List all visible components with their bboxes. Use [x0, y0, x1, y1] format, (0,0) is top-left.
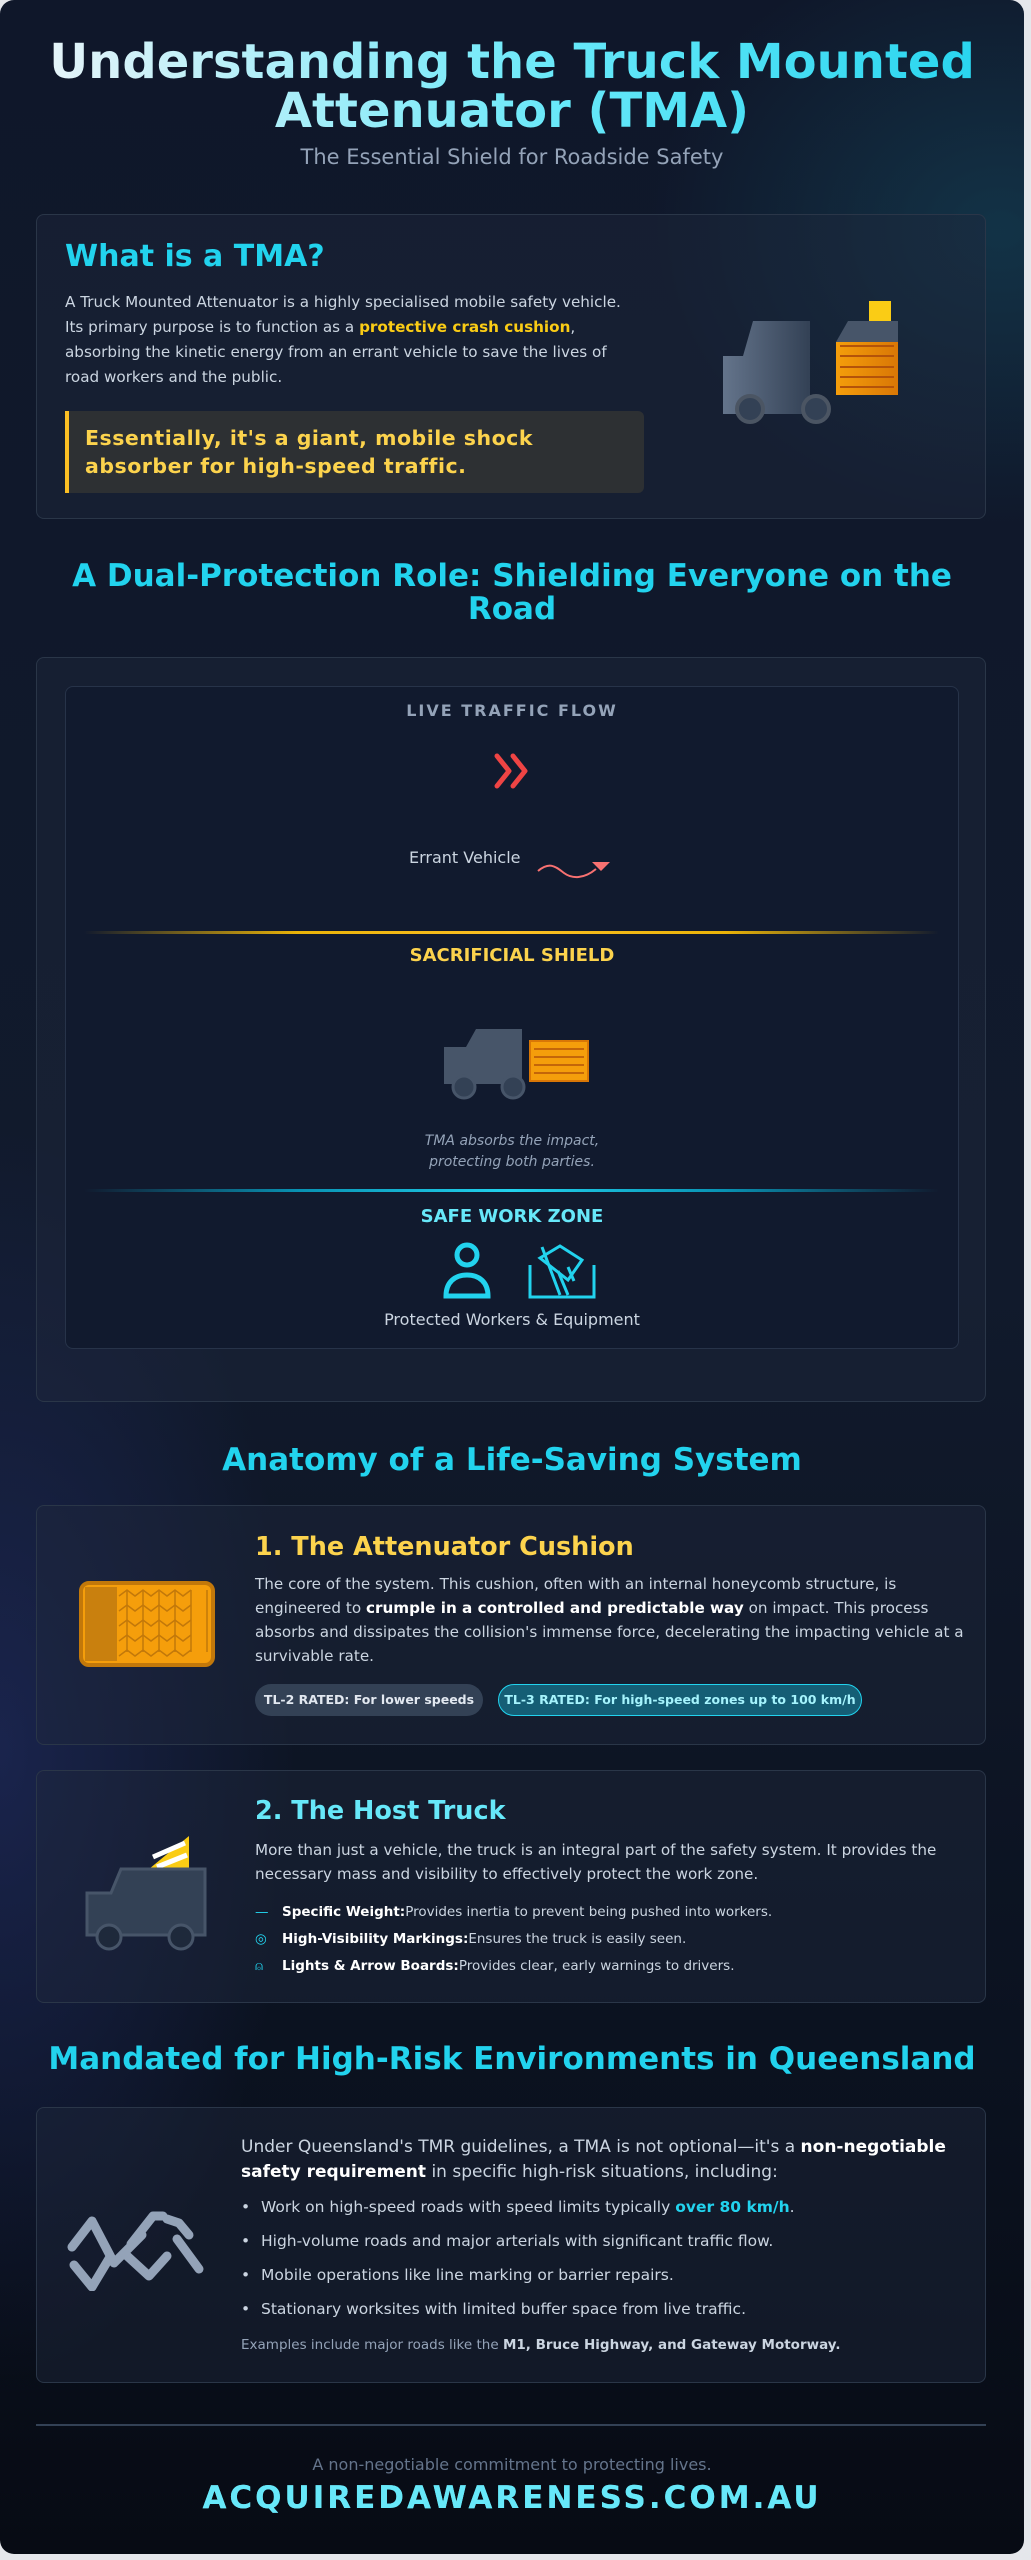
list: truck features: [255, 1904, 772, 1974]
list: situations: High-volume roads and major arterials with significant traffic flow.: [261, 2232, 773, 2250]
icon: equipment: [528, 1244, 596, 1298]
list: situations: •: [241, 2266, 250, 2284]
label: safe work zone: SAFE WORK ZONE: [421, 1206, 603, 1227]
icon: red chevrons: [494, 754, 528, 788]
heading: 1. The Attenuator Cushion: [255, 1532, 634, 1562]
list: situations: •: [241, 2232, 250, 2250]
list: situations: Work on high-speed roads with speed limits typically over 80 km/h.: [261, 2198, 795, 2216]
panel: what is a TMA: [36, 214, 986, 519]
label: live traffic flow: LIVE TRAFFIC FLOW: [406, 701, 618, 720]
title: Attenuator (TMA): [275, 83, 749, 139]
subtitle: The Essential Shield for Roadside Safety: [301, 145, 723, 169]
panel: mandated: [36, 2107, 986, 2383]
caption: [425, 1133, 599, 1170]
icon: tools: [68, 2212, 204, 2291]
icon: cushion: [79, 1581, 215, 1667]
list: truck features: High-Visibility Markings:Ensures the truck is easily seen.: [282, 1931, 686, 1947]
label: errant vehicle: Errant Vehicle: [409, 848, 521, 867]
label: sacrificial shield: SACRIFICIAL SHIELD: [410, 945, 614, 966]
text block: More than just a vehicle, the truck is an integral part of the safety system. It provides the necessary mass and visibility to effectively protect the work zone.: [255, 1841, 936, 1883]
heading: What is a TMA?: [65, 239, 325, 274]
text block: A Truck Mounted Attenuator is a highly specialised mobile safety vehicle. Its primary purpose is to function as a protective crash cushion, absorbing the kinetic energy from an errant vehicle to save the lives of road workers and the public.: [65, 293, 621, 386]
badge: TL-2: [255, 1684, 483, 1716]
panel: attenuator cushion: [36, 1505, 986, 1745]
badge: TL-2: TL-2 RATED: For lower speeds: [264, 1692, 474, 1707]
text block: The core of the system. This cushion, often with an internal honeycomb structure, is engineered to crumple in a controlled and predictable way on impact. This process absorbs and dissipates the collision's immense force, decelerating the impacting vehicle at a survivable rate.: [255, 1575, 964, 1665]
list: truck features: Specific Weight:Provides inertia to prevent being pushed into workers.: [282, 1904, 772, 1920]
title: Understanding the Truck Mounted: [49, 34, 975, 90]
callout: Essentially, it's a giant, mobile shock absorber for high-speed traffic.: [85, 426, 533, 478]
caption: protecting both parties.: [429, 1154, 595, 1170]
footer tagline: A non-negotiable commitment to protecting lives.: [312, 2455, 712, 2474]
heading: anatomy: Anatomy of a Life-Saving System: [222, 1442, 802, 1478]
caption: TMA absorbs the impact,: [425, 1133, 599, 1149]
footer brand: ACQUIREDAWARENESS.COM.AU: [202, 2480, 822, 2516]
panel: dual protection diagram: [36, 657, 986, 1402]
text block: Under Queensland's TMR guidelines, a TMA is not optional—it's a non-negotiable safety requirement in specific high-risk situations, including:: [241, 2137, 946, 2182]
heading: 2. The Host Truck: [255, 1796, 506, 1826]
list: truck features: —: [255, 1904, 268, 1920]
list: situations: •: [241, 2198, 250, 2216]
list: truck features: Lights & Arrow Boards:Provides clear, early warnings to drivers.: [282, 1958, 734, 1974]
heading: dual protection: A Dual-Protection Role: Shielding Everyone on the: [72, 558, 952, 594]
list: truck features: ⍝: [255, 1958, 263, 1974]
icon: host truck: [86, 1836, 206, 1950]
badge: TL-3: TL-3 RATED: For high-speed zones up to 100 km/h: [504, 1692, 856, 1707]
title: [0, 38, 1024, 136]
list: situations: [241, 2198, 795, 2318]
diagram box: [65, 686, 959, 1349]
badge: TL-3: [498, 1684, 862, 1716]
list: situations: Stationary worksites with limited buffer space from live traffic.: [261, 2300, 746, 2318]
heading: dual protection: Road: [468, 591, 556, 627]
callout: [65, 411, 644, 493]
list: situations: Mobile operations like line marking or barrier repairs.: [261, 2266, 674, 2284]
note: Examples include major roads like the M1, Bruce Highway, and Gateway Motorway.: [241, 2337, 840, 2353]
heading: dual protection: [72, 558, 952, 627]
list: situations: •: [241, 2300, 250, 2318]
icon: TMA truck small: [444, 1029, 589, 1100]
footer brand: [0, 2480, 1024, 2516]
list: truck features: ◎: [255, 1931, 267, 1947]
panel: host truck: [36, 1770, 986, 2003]
icon: TMA truck: [723, 301, 898, 424]
heading: mandated: Mandated for High-Risk Environments in Queensland: [48, 2041, 976, 2077]
icon: worker: [444, 1242, 490, 1298]
arrow: swerve: [537, 862, 610, 878]
label: protected: Protected Workers & Equipment: [384, 1310, 640, 1329]
